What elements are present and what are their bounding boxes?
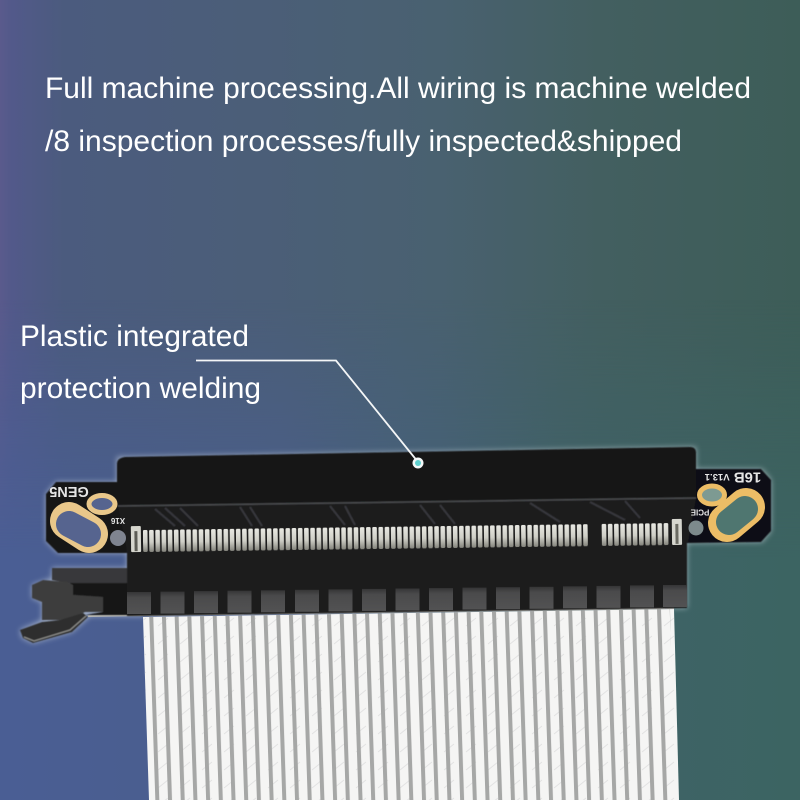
housing teeth [127,585,687,614]
right gold mounting ring [700,486,746,523]
callout label: protection welding [20,372,261,405]
upper housing [117,447,696,540]
heading text: /8 inspection processes/fully inspected&shipped [45,125,682,158]
latch shadow [70,583,127,615]
trace marks [155,501,640,526]
housing ridge [118,498,696,506]
connector body [20,447,771,643]
mid housing [118,498,696,552]
right ear markings [688,468,761,536]
left ear markings: GEN5 [49,483,89,499]
callout label: Plastic integrated [20,320,249,353]
heading text [45,72,751,158]
left PCB ear [46,482,127,553]
right ear markings: PCIE [690,508,709,516]
latch base [52,568,127,612]
left ear markings: X16 [110,516,125,525]
right PCB ear [687,469,771,543]
spring contacts [131,519,682,552]
callout label [20,320,261,405]
latch lever [20,613,88,643]
latch block [32,580,103,620]
left gold mounting ring [69,496,115,534]
lever highlights [24,616,86,641]
product halo [20,447,771,643]
callout leader line [196,360,424,468]
lower housing [127,535,687,616]
heading text: Full machine processing.All wiring is machine welded [45,72,751,105]
left ear markings [49,483,126,546]
right ear markings: 16B V13.1 [704,468,761,486]
ribbon cable [88,608,679,800]
